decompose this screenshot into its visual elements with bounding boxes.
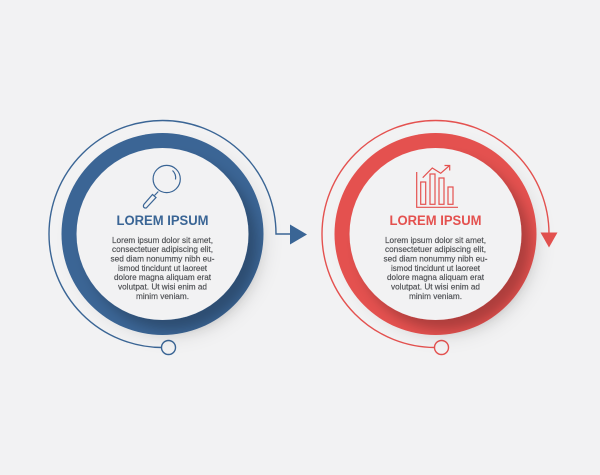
body text: blue panel: dolore magna aliquam erat — [114, 273, 212, 282]
body text: red panel: sed diam nonummy nibh eu- — [384, 254, 488, 264]
body text: blue panel: minim veniam. — [136, 292, 189, 301]
body text: blue panel: consectetuer adipiscing elit, — [112, 245, 213, 254]
blue outer line with arrow — [49, 121, 307, 348]
body text: red panel: ismod tincidunt ut laoreet — [391, 264, 481, 273]
body text: blue panel: volutpat. Ut wisi enim ad — [118, 282, 207, 292]
body text: blue panel: Lorem ipsum dolor sit amet, — [112, 236, 213, 245]
panel: step one, blue — [49, 121, 307, 354]
red line start node — [434, 340, 448, 354]
heading: blue: LOREM IPSUM — [116, 213, 208, 228]
icon: bar chart with rising arrow — [417, 166, 458, 207]
blue line start node — [162, 340, 176, 354]
body text: red panel: volutpat. Ut wisi enim ad — [391, 282, 480, 292]
body text: red panel: dolore magna aliquam erat — [387, 273, 485, 282]
panel: step two, red — [322, 121, 558, 354]
red thick ring — [334, 133, 536, 335]
white inner disc — [350, 148, 522, 320]
heading: red: LOREM IPSUM — [390, 213, 482, 228]
body text: red panel: minim veniam. — [409, 292, 462, 301]
body text: blue panel: ismod tincidunt ut laoreet — [118, 264, 208, 273]
body text: blue panel: sed diam nonummy nibh eu- — [110, 254, 215, 264]
blue thick ring — [62, 133, 264, 335]
icon: magnifying glass — [143, 165, 180, 208]
red outer line with arrow — [322, 121, 558, 348]
body text: red panel — [384, 236, 488, 301]
body text: blue panel — [110, 236, 215, 301]
body text: red panel: consectetuer adipiscing elit, — [385, 245, 486, 254]
white inner disc — [76, 148, 248, 320]
body text: red panel: Lorem ipsum dolor sit amet, — [385, 236, 486, 245]
